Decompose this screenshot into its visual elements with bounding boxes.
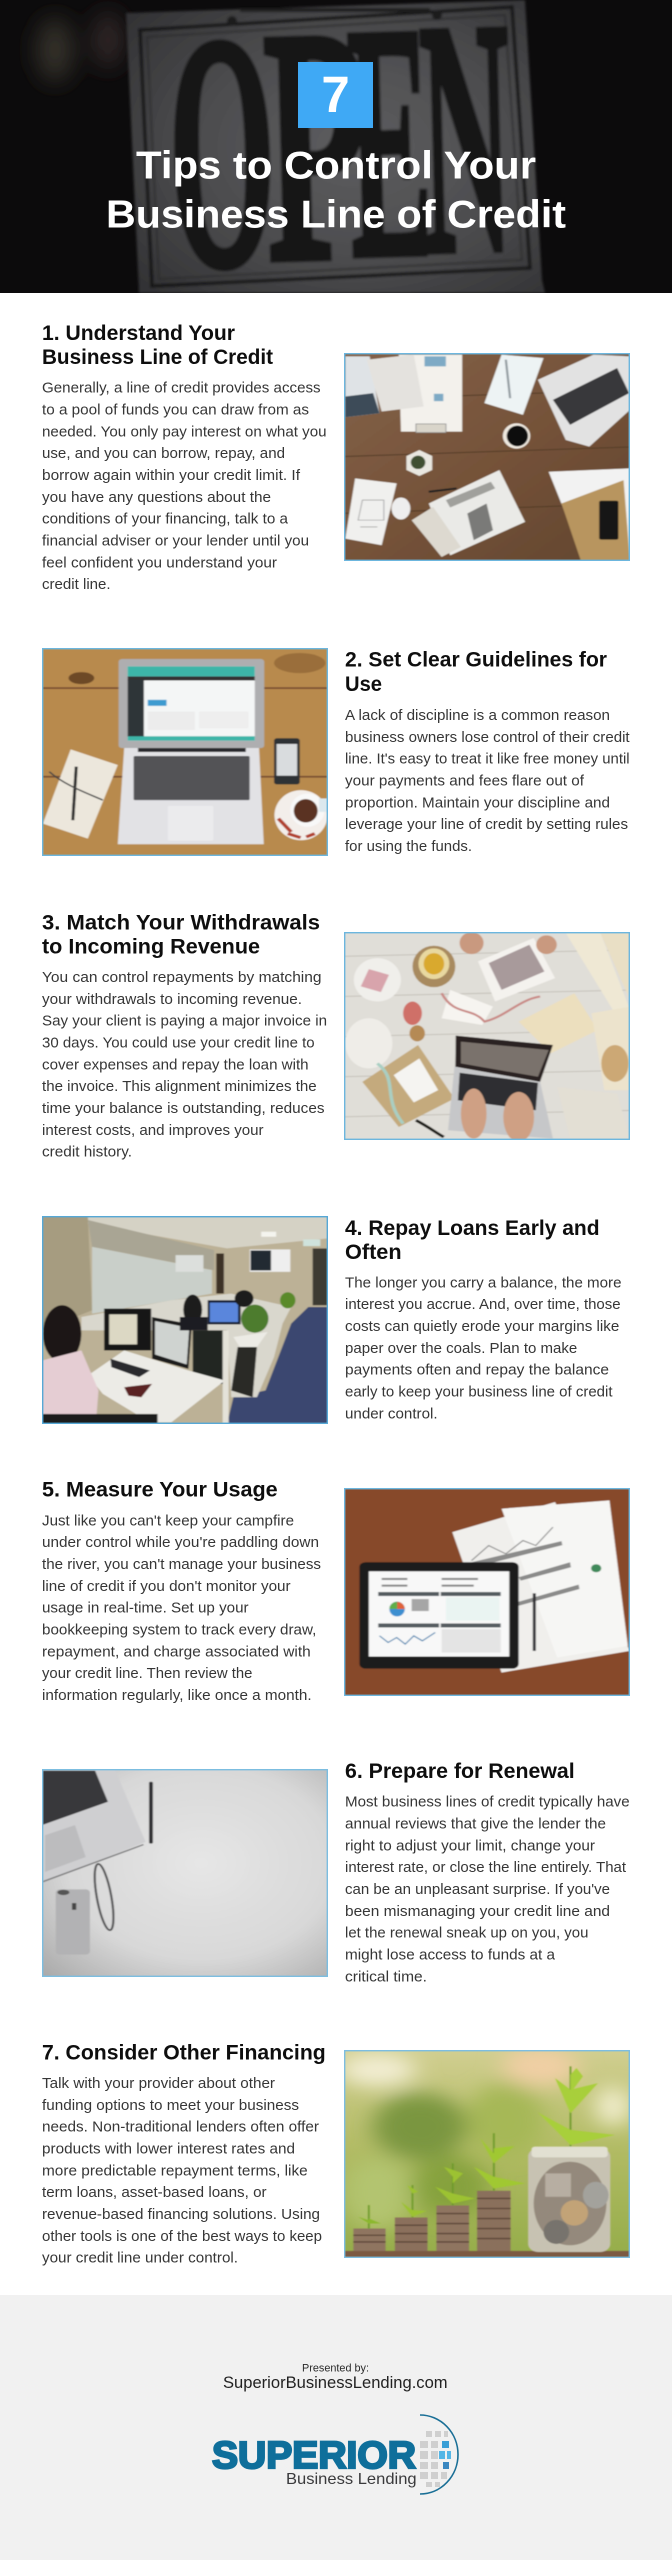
- panel: tip 1: [42, 322, 639, 593]
- photo: craft desk with laptop: [339, 928, 639, 1145]
- text block: tip 1: borrow again within your credit limit. If: [42, 468, 301, 484]
- text block: tip 4: interest you accrue. And, over time, those: [345, 1297, 621, 1313]
- text block: tip 2: for using the funds.: [345, 839, 472, 855]
- panel: footer: [0, 2295, 672, 2560]
- text block: tip 3: interest costs, and improves your: [42, 1123, 264, 1139]
- text block: tip 5: information regularly, like once a month.: [42, 1688, 312, 1704]
- wordmark: Business Lending: Business Lending: [286, 2471, 417, 2488]
- panel: tip 7: [42, 2041, 639, 2267]
- text block: tip 6: been mismanaging your credit line and: [345, 1904, 610, 1920]
- photo: open plan office: [39, 1213, 334, 1427]
- text block: tip 2: proportion. Maintain your discipline and: [345, 795, 610, 811]
- text block: tip 1: to a pool of funds you can draw from as: [42, 402, 309, 418]
- text block: tip 5: [42, 1513, 321, 1704]
- heading: tip 3: 3. Match Your Withdrawals: [42, 911, 320, 934]
- photo: business desk from above: [339, 350, 639, 567]
- heading: tip 2: 2. Set Clear Guidelines for: [345, 649, 607, 672]
- text block: tip 4: [345, 1275, 622, 1422]
- text block: tip 7: your credit line under control.: [42, 2251, 238, 2267]
- background photo: open sign: [0, 0, 672, 339]
- text block: tip 5: line of credit if you don't monitor your: [42, 1579, 291, 1595]
- panel: tip 5: [42, 1479, 639, 1704]
- heading: tip 5: 5. Measure Your Usage: [42, 1479, 278, 1502]
- title: [106, 145, 566, 237]
- photo: laptop on wooden table: [39, 645, 334, 859]
- text block: tip 1: feel confident you understand your: [42, 555, 277, 571]
- heading: tip 3: to Incoming Revenue: [42, 935, 260, 958]
- photo: coin stacks with seedlings: [339, 2046, 639, 2264]
- text block: tip 3: your withdrawals to incoming revenue.: [42, 992, 302, 1008]
- text block: tip 5: the river, you can't manage your business: [42, 1557, 321, 1573]
- heading: tip 7: 7. Consider Other Financing: [42, 2041, 326, 2064]
- text block: tip 4: payments often and repay the balance: [345, 1363, 609, 1379]
- heading: tip 1: 1. Understand Your: [42, 322, 235, 345]
- heading: tip 3: [42, 911, 320, 958]
- text block: tip 6: right to adjust your limit, change your: [345, 1838, 595, 1854]
- panel: tip 2: [39, 645, 630, 859]
- heading: tip 6: 6. Prepare for Renewal: [345, 1760, 575, 1783]
- text block: tip 5: your credit line. Then review the: [42, 1666, 252, 1682]
- icon: globe: [420, 2415, 458, 2494]
- text block: tip 5: repayment, and charge associated with: [42, 1644, 311, 1660]
- text block: tip 2: [345, 708, 630, 855]
- heading: tip 1: Business Line of Credit: [42, 346, 273, 369]
- title: Tips to Control Your: [136, 145, 536, 188]
- text block: tip 6: might lose access to funds at a: [345, 1948, 556, 1964]
- text block: tip 4: under control.: [345, 1406, 438, 1422]
- photo: laptop, glasses and phone on grey desk: [39, 1767, 334, 1981]
- text block: tip 2: your payments and fees flare out of: [345, 774, 585, 790]
- text block: tip 5: Just like you can't keep your campfire: [42, 1513, 294, 1529]
- panel: tip 3: [42, 911, 639, 1161]
- text block: tip 3: [42, 970, 327, 1161]
- text block: tip 6: annual reviews that give the lender the: [345, 1816, 606, 1832]
- badge: number 7: [298, 62, 373, 128]
- text block: tip 3: time your balance is outstanding, reduces: [42, 1101, 324, 1117]
- text block: tip 7: products with lower interest rates and: [42, 2142, 295, 2158]
- text block: tip 7: other tools is one of the best ways to keep: [42, 2229, 322, 2245]
- text block: tip 6: critical time.: [345, 1969, 427, 1985]
- heading: tip 1: [42, 322, 273, 369]
- text: presented by: Presented by:: [302, 2363, 369, 2375]
- text block: tip 6: can be an unpleasant surprise. If you've: [345, 1882, 610, 1898]
- text block: tip 7: Talk with your provider about other: [42, 2076, 275, 2092]
- text block: tip 7: needs. Non-traditional lenders often offer: [42, 2120, 319, 2136]
- heading: tip 4: [345, 1217, 600, 1264]
- text block: tip 5: under control while you're paddling down: [42, 1535, 319, 1551]
- text block: tip 1: use, and you can borrow, repay, and: [42, 446, 285, 462]
- text block: tip 7: funding options to meet your business: [42, 2098, 299, 2114]
- text block: tip 3: Say your client is paying a major invoice in: [42, 1014, 327, 1030]
- wordmark: SUPERIOR: SUPERIOR: [212, 2435, 416, 2477]
- text block: tip 2: business owners lose control of their credit: [345, 730, 630, 746]
- logo: Superior Business Lending: [212, 2415, 458, 2494]
- title: Business Line of Credit: [106, 194, 566, 237]
- text block: tip 1: needed. You only pay interest on what you: [42, 424, 327, 440]
- text block: tip 1: [42, 381, 327, 593]
- text block: tip 4: early to keep your business line of credit: [345, 1384, 612, 1400]
- text: website: SuperiorBusinessLending.com: [223, 2373, 448, 2392]
- text block: tip 6: interest rate, or close the line entirely. That: [345, 1860, 626, 1876]
- text block: tip 3: 30 days. You could use your credit line to: [42, 1036, 315, 1052]
- text block: tip 7: revenue-based financing solutions. Using: [42, 2207, 320, 2223]
- text block: tip 2: leverage your line of credit by setting rules: [345, 817, 628, 833]
- text block: tip 2: line. It's easy to treat it like free money until: [345, 752, 630, 768]
- text block: tip 4: costs can quietly erode your margins like: [345, 1319, 619, 1335]
- text block: tip 1: you have any questions about the: [42, 490, 271, 506]
- badge: number 7: 7: [321, 66, 350, 123]
- panel: tip 6: [39, 1760, 630, 1985]
- heading: tip 2: [345, 649, 607, 696]
- heading: tip 2: Use: [345, 673, 382, 696]
- text block: tip 4: The longer you carry a balance, the more: [345, 1275, 622, 1291]
- text block: tip 5: bookkeeping system to track every draw,: [42, 1622, 316, 1638]
- heading: tip 4: 4. Repay Loans Early and: [345, 1217, 600, 1240]
- photo: tablet with charts on wood: [339, 1484, 639, 1701]
- text block: tip 7: more predictable repayment terms, like: [42, 2163, 308, 2179]
- text block: tip 1: financial adviser or your lender until you: [42, 534, 309, 550]
- text block: tip 1: conditions of your financing, talk to a: [42, 512, 289, 528]
- text block: tip 7: term loans, asset-based loans, or: [42, 2185, 267, 2201]
- panel: tip 4: [39, 1213, 622, 1427]
- text block: tip 6: let the renewal sneak up on you, you: [345, 1926, 588, 1942]
- text block: tip 7: [42, 2076, 322, 2267]
- text block: tip 6: Most business lines of credit typically have: [345, 1795, 630, 1811]
- text block: tip 3: You can control repayments by matching: [42, 970, 322, 986]
- text block: tip 6: [345, 1795, 630, 1985]
- text block: tip 2: A lack of discipline is a common reason: [345, 708, 610, 724]
- text block: tip 3: the invoice. This alignment minimizes the: [42, 1079, 317, 1095]
- text block: tip 1: credit line.: [42, 577, 111, 593]
- text block: tip 4: paper over the coals. Plan to make: [345, 1341, 577, 1357]
- panel: hero header: [0, 0, 672, 339]
- text block: tip 3: cover expenses and repay the loan with: [42, 1057, 309, 1073]
- heading: tip 4: Often: [345, 1241, 402, 1264]
- text block: tip 1: Generally, a line of credit provides access: [42, 381, 321, 397]
- text block: tip 5: usage in real-time. Set up your: [42, 1601, 249, 1617]
- text block: tip 3: credit history.: [42, 1145, 132, 1161]
